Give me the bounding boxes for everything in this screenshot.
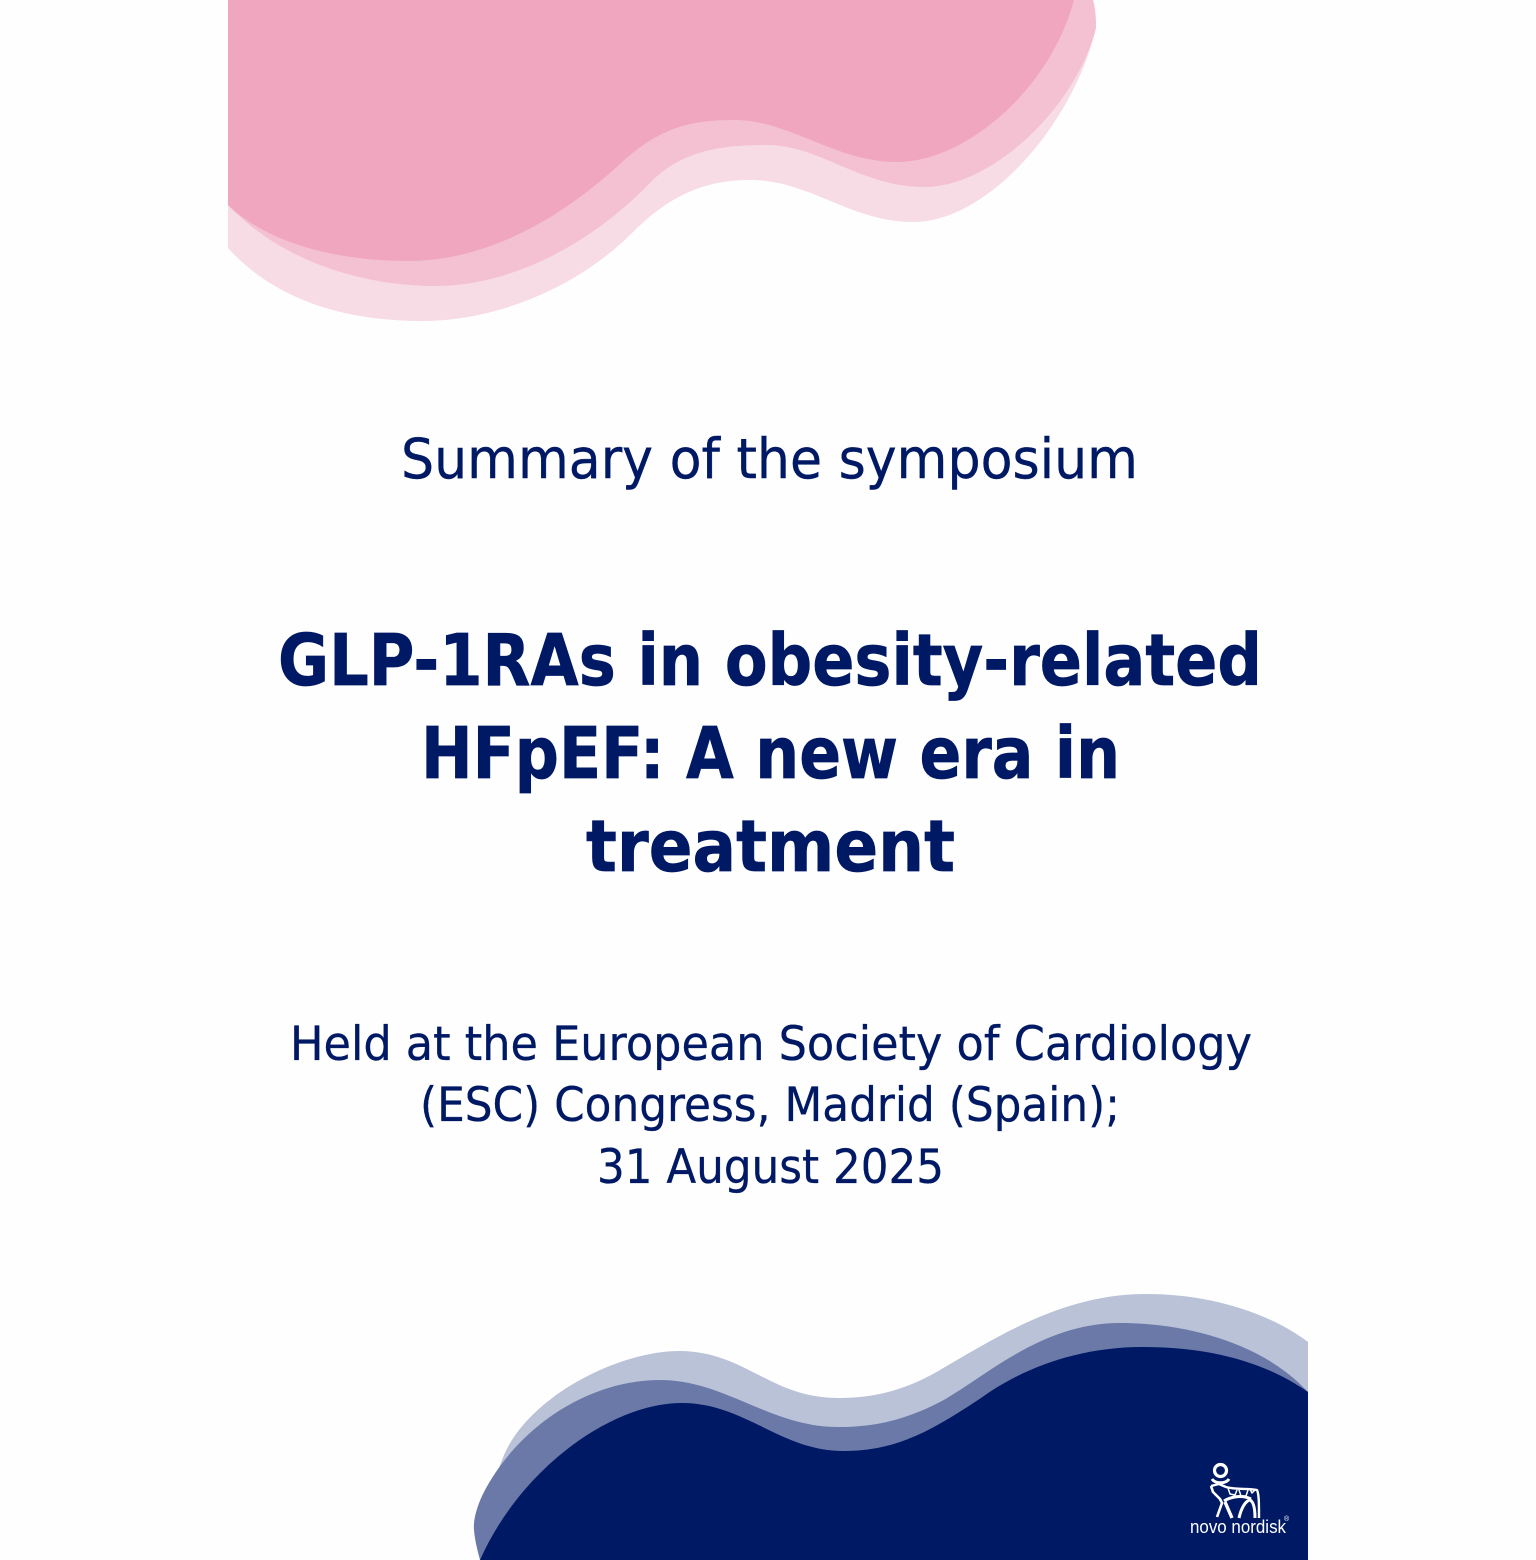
subtitle: Summary of the symposium [401, 427, 1138, 491]
navy wave decoration [474, 1294, 1308, 1560]
logo wordmark: novo nordisk [1190, 1517, 1287, 1537]
logo: novo nordisk [1190, 1464, 1290, 1537]
pink wave decoration [228, 0, 1096, 321]
icon: bull with ring [1211, 1464, 1259, 1518]
title: GLP-1RAs in obesity-related [278, 619, 1262, 702]
registered mark: ® [1284, 1515, 1290, 1523]
event details [290, 1017, 1252, 1195]
event details: 31 August 2025 [597, 1140, 944, 1195]
event details: (ESC) Congress, Madrid (Spain); [420, 1078, 1120, 1133]
title: treatment [586, 805, 955, 888]
event details: Held at the European Society of Cardiology [290, 1017, 1252, 1072]
title [278, 619, 1262, 888]
title: HFpEF: A new era in [421, 712, 1120, 795]
